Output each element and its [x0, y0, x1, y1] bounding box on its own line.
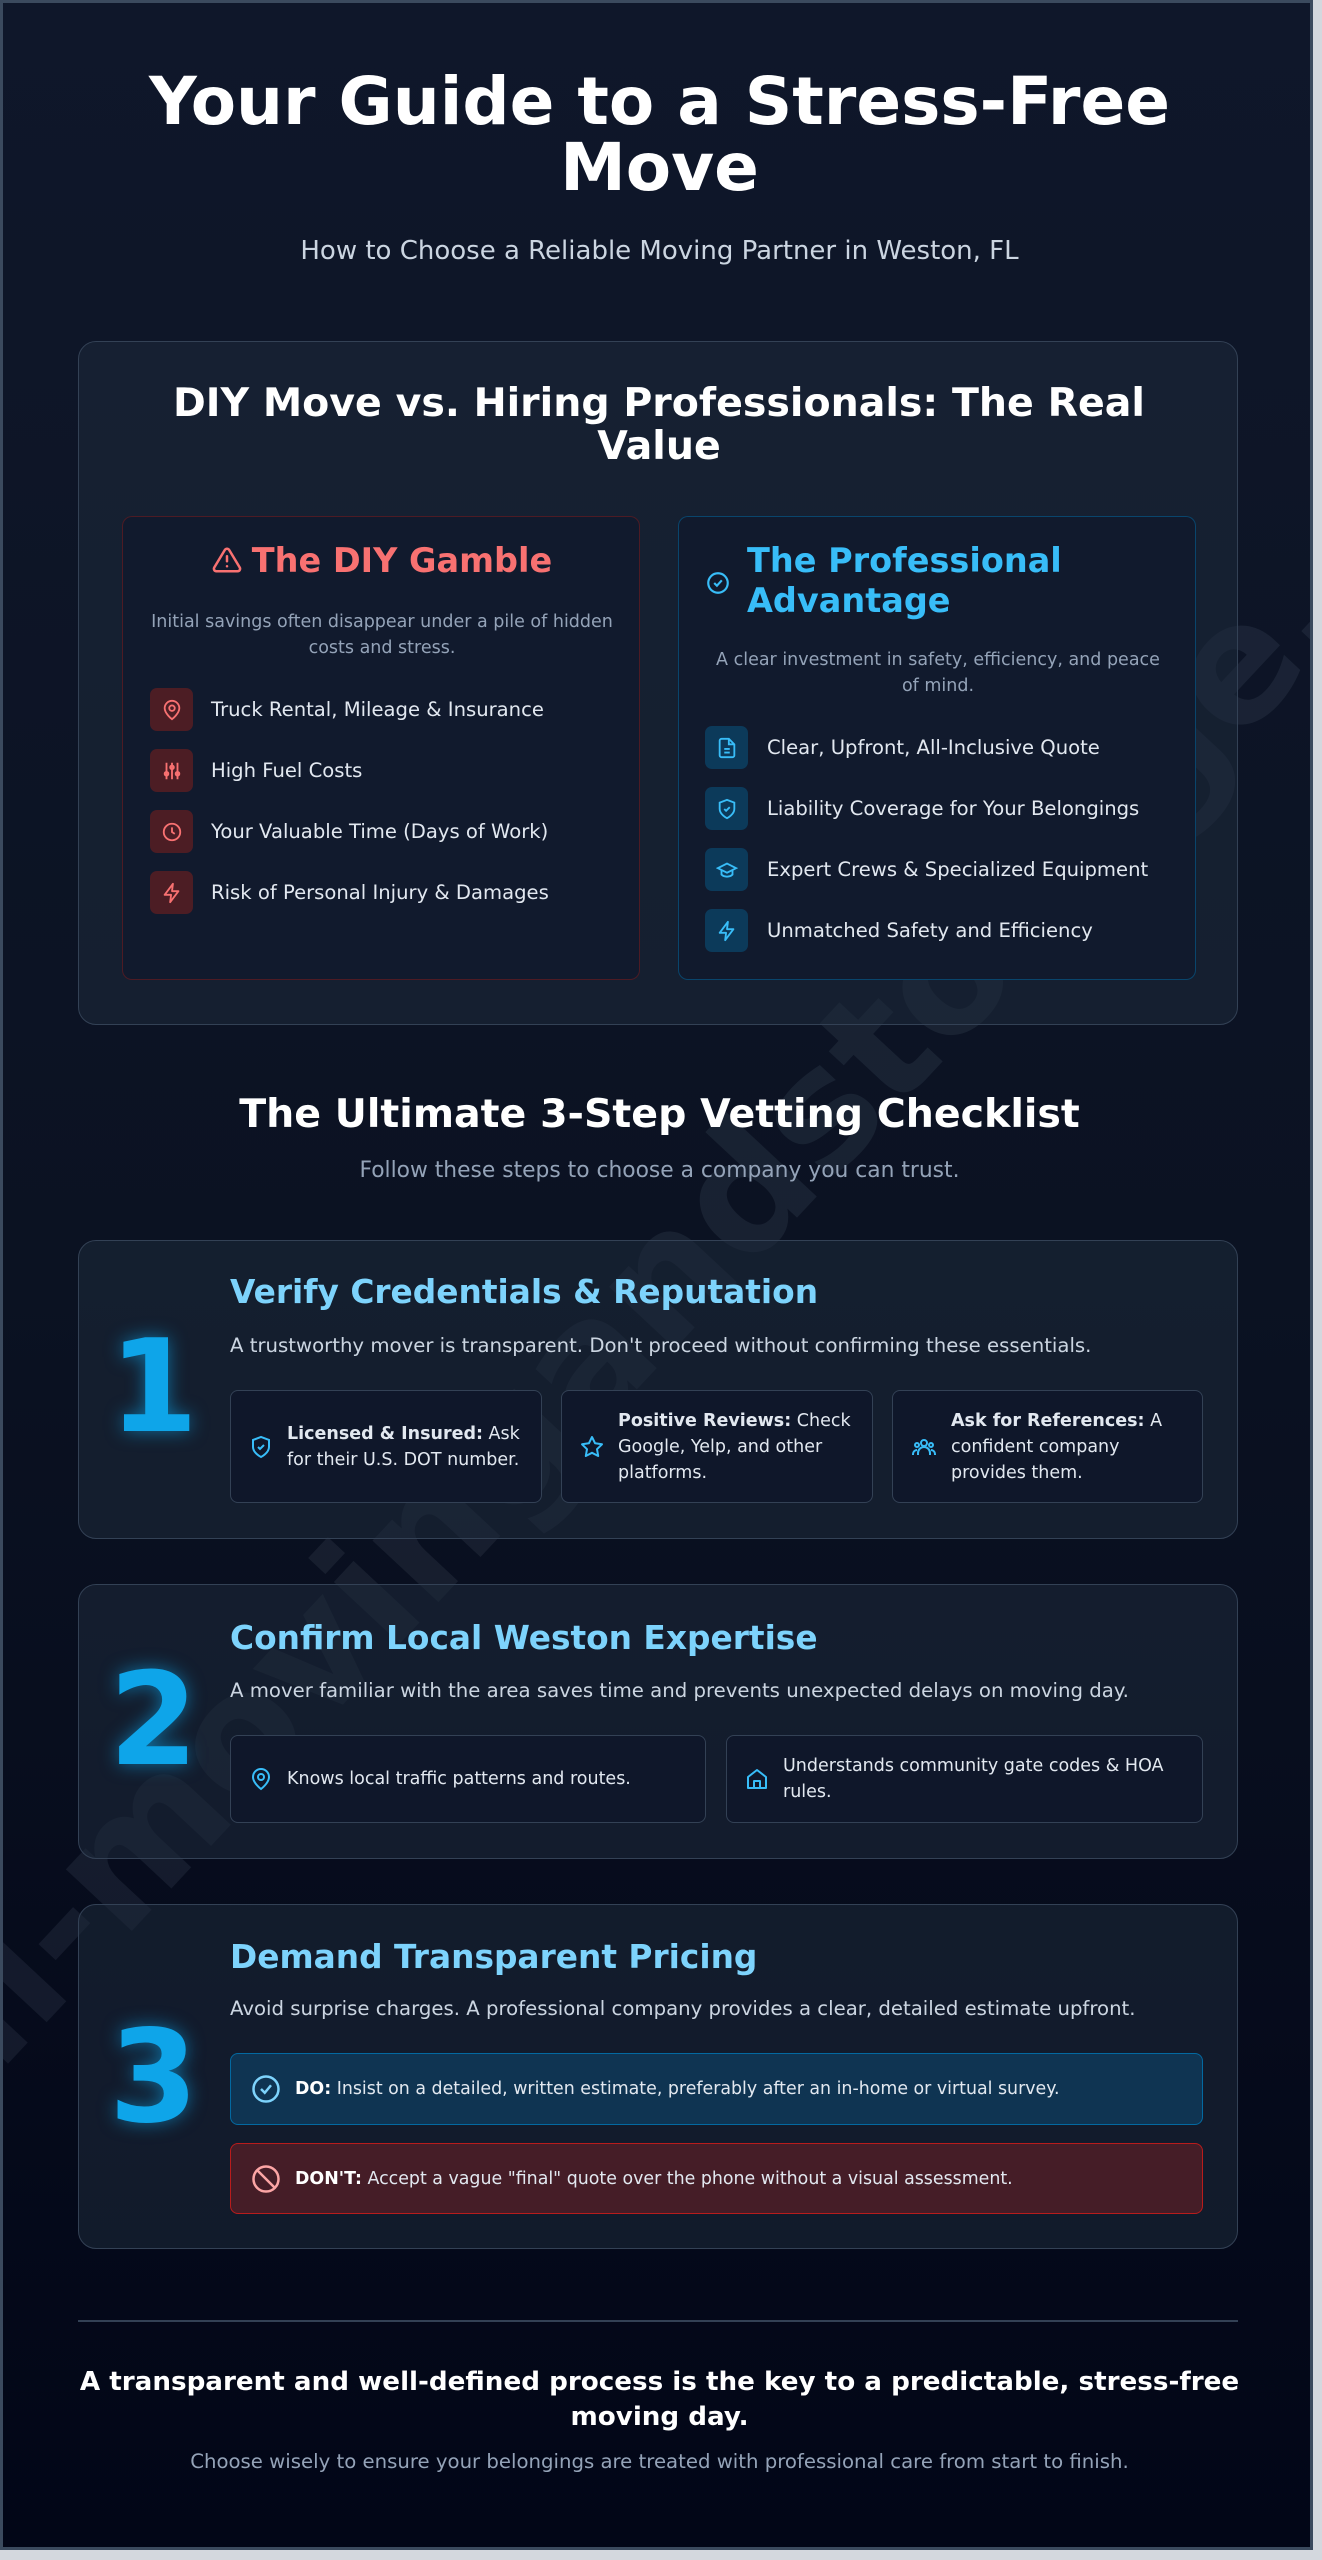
DIY heading: The DIY Gamble	[252, 541, 552, 580]
step number 3: 3	[109, 2003, 198, 2152]
pro items: Expert Crews & Specialized Equipment	[767, 858, 1148, 881]
expertise boxes: Knows local traffic patterns and routes.	[287, 1769, 631, 1789]
card: professional advantage	[678, 516, 1196, 980]
DON'T box	[230, 2143, 1203, 2214]
section subtitle: Follow these steps to choose a company you can trust.	[359, 1158, 960, 1183]
step 3 content	[230, 1938, 1203, 2214]
pro items: Unmatched Safety and Efficiency	[767, 919, 1093, 942]
pro items: Clear, Upfront, All-Inclusive Quote	[767, 736, 1100, 759]
conclusion: A transparent and well-defined process is the key to a predictable, stress-free moving day.	[80, 2367, 1239, 2432]
step 2 content: Understands community gate codes & HOA rules.	[783, 1756, 1164, 1802]
subtitle: How to Choose a Reliable Moving Partner in Weston, FL	[300, 236, 1019, 266]
step 1 content: Verify Credentials & Reputation	[230, 1273, 818, 1311]
divider	[78, 2320, 1238, 2322]
step 2 content: Confirm Local Weston Expertise	[230, 1619, 818, 1657]
pro items	[705, 726, 1148, 952]
step 1 content: Positive Reviews: Check Google, Yelp, and other platforms.	[618, 1410, 851, 1482]
DIY items: Your Valuable Time (Days of Work)	[211, 820, 548, 843]
expertise boxes	[230, 1735, 706, 1823]
pro icon	[707, 572, 729, 594]
pro heading: Advantage	[747, 581, 951, 620]
section title: The Ultimate 3-Step Vetting Checklist	[239, 1091, 1080, 1137]
step number 2: 2	[109, 1646, 198, 1795]
panel heading: DIY Move vs. Hiring Professionals: The Real	[173, 380, 1145, 426]
title: Move	[560, 129, 759, 206]
DIY description: Initial savings often disappear under a pile of hidden costs and stress.	[151, 612, 613, 658]
step 3 card	[78, 1904, 1238, 2249]
DIY items: Risk of Personal Injury & Damages	[211, 881, 549, 904]
credential boxes: Licensed & Insured: Ask for their U.S. DOT number.	[287, 1424, 520, 1470]
DO box	[230, 2053, 1203, 2125]
step 1 content: A trustworthy mover is transparent. Don't proceed without confirming these essentials.	[230, 1334, 1091, 1357]
card: DIY gamble	[122, 516, 640, 980]
step 1 content: Ask for References: A confident company provides them.	[951, 1410, 1162, 1482]
closing note: Choose wisely to ensure your belongings are treated with professional care from start to finish.	[190, 2450, 1129, 2473]
title	[148, 63, 1170, 206]
step number 1: 1	[109, 1313, 198, 1462]
DIY items: High Fuel Costs	[211, 759, 362, 782]
step 1 card	[78, 1240, 1238, 1539]
pro items: Liability Coverage for Your Belongings	[767, 797, 1139, 820]
credential boxes	[230, 1390, 542, 1503]
pro heading	[747, 541, 1062, 620]
DO box: DO: Insist on a detailed, written estimate, preferably after an in-home or virtual survey.	[295, 2079, 1060, 2099]
title: Your Guide to a Stress-Free	[149, 63, 1170, 140]
step 2 content: A mover familiar with the area saves time and prevents unexpected delays on moving day.	[230, 1679, 1129, 1702]
DIY items: Truck Rental, Mileage & Insurance	[211, 698, 544, 721]
panel heading	[173, 380, 1145, 469]
step 3 content: Avoid surprise charges. A professional company provides a clear, detailed estimate upfront.	[230, 1997, 1136, 2020]
DON'T box: DON'T: Accept a vague "final" quote over the phone without a visual assessment.	[295, 2168, 1013, 2188]
pro heading: The Professional	[747, 541, 1062, 580]
panel: DIY vs professionals	[78, 341, 1238, 1025]
panel heading: Value	[597, 423, 721, 469]
step 3 content: Demand Transparent Pricing	[230, 1938, 757, 1976]
step 1 content	[230, 1273, 1203, 1503]
DIY items	[150, 688, 549, 914]
step 2 content	[230, 1619, 1203, 1823]
step 2 card	[78, 1584, 1238, 1859]
pro description: A clear investment in safety, efficiency, and peace of mind.	[716, 650, 1160, 696]
